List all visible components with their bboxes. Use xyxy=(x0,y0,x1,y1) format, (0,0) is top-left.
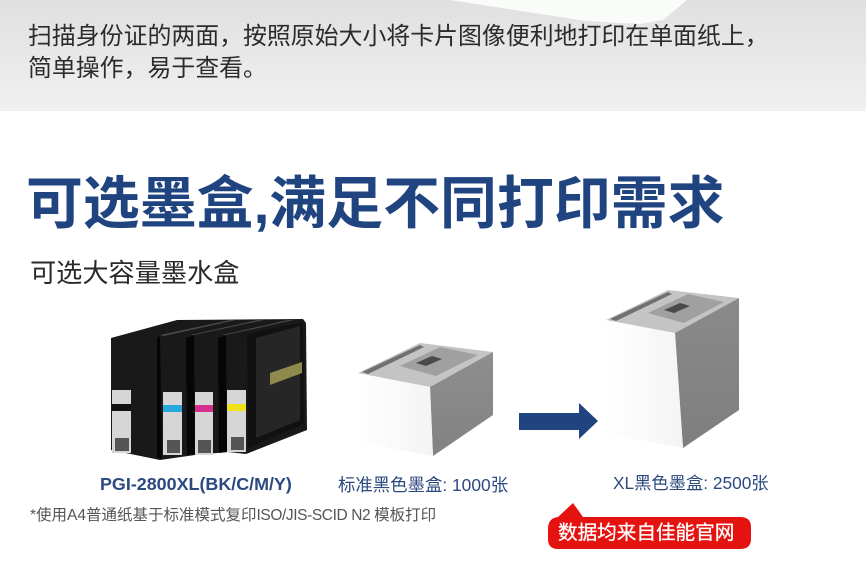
callout text: 数据均来自佳能官网 xyxy=(558,522,734,544)
banner description text: 扫描身份证的两面，按照原始大小将卡片图像便利地打印在单面纸上， xyxy=(28,23,769,50)
large paper stack xyxy=(606,290,739,448)
caption: cartridge model: PGI-2800XL(BK/C/M/Y) xyxy=(100,474,292,494)
banner description text: 简单操作，易于查看。 xyxy=(28,55,267,82)
caption: standard cartridge yield: 标准黑色墨盒: 1000张 xyxy=(338,475,508,495)
top grey banner xyxy=(0,0,866,111)
caption: XL cartridge yield: XL黑色墨盒: 2500张 xyxy=(613,473,769,493)
red data source callout xyxy=(548,503,751,549)
banner description text xyxy=(28,23,769,82)
section title: 可选墨盒,满足不同打印需求 xyxy=(26,172,724,236)
subtitle: 可选大容量墨水盒 xyxy=(30,258,240,288)
arrow xyxy=(519,403,598,439)
cartridge bodies xyxy=(111,319,307,460)
labels xyxy=(112,390,246,455)
small paper stack xyxy=(358,343,493,456)
footnote: *使用A4普通纸基于标准模式复印ISO/JIS-SCID N2 模板打印 xyxy=(30,507,436,524)
ink cartridges image xyxy=(111,319,307,460)
